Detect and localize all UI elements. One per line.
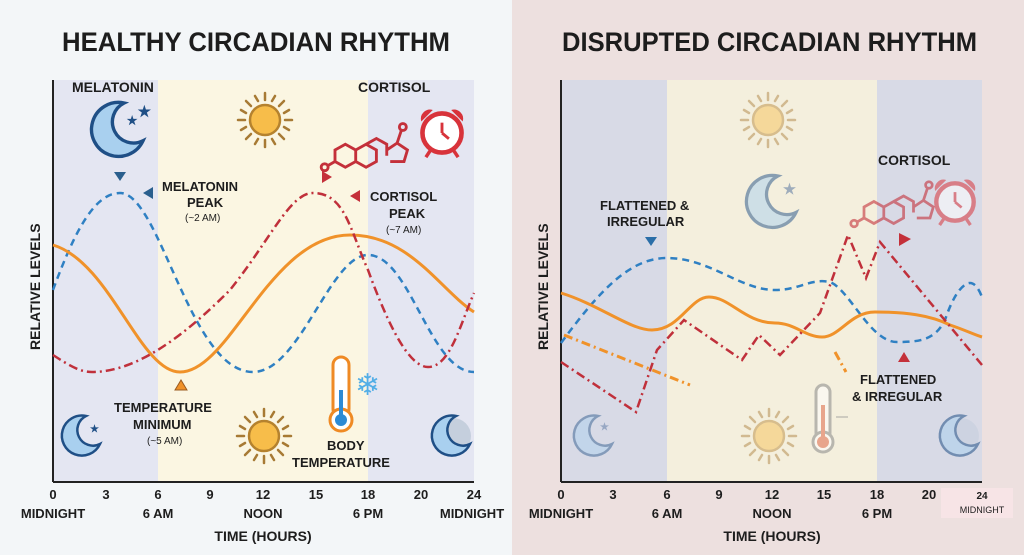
x-axis ticks: 15 xyxy=(309,487,323,502)
line: cortisol xyxy=(53,193,474,372)
label: body temperature: BODY xyxy=(327,438,365,453)
x-axis ticks: 15 xyxy=(817,487,831,502)
icon: sun bottom xyxy=(237,409,291,463)
x-axis ticks: 6 PM xyxy=(862,506,892,521)
line: cortisol disrupted xyxy=(561,235,982,412)
callout: temperature minimum: (~5 AM) xyxy=(147,436,182,447)
callout: flattened melatonin: FLATTENED & xyxy=(600,198,689,213)
icon: faded moon xyxy=(746,175,796,227)
x-axis ticks: NOON xyxy=(244,506,282,521)
line: melatonin xyxy=(53,193,474,372)
x-axis ticks: 9 xyxy=(206,487,214,502)
icon: faded moon bottom-left: ★ xyxy=(600,422,609,433)
marker: cortisol xyxy=(899,233,911,246)
icon: moon bottom-right xyxy=(432,416,471,456)
icon: sun top xyxy=(238,93,292,147)
icon: thermometer xyxy=(330,357,352,431)
x-axis ticks: MIDNIGHT xyxy=(21,506,85,521)
panel: healthy background xyxy=(0,0,512,555)
callout: temperature minimum: TEMPERATURE xyxy=(114,400,212,415)
x-axis ticks: 6 AM xyxy=(652,506,682,521)
chart: disrupted xyxy=(529,80,1013,544)
chart: healthy xyxy=(21,79,504,544)
icon: faded clock xyxy=(935,180,975,225)
icon: faded sun top xyxy=(741,93,795,147)
x-axis ticks: 0 xyxy=(49,487,57,502)
x-axis ticks: MIDNIGHT xyxy=(440,506,504,521)
icon: moon bottom-left: ★ xyxy=(90,424,99,435)
callout: melatonin peak: (~2 AM) xyxy=(185,213,220,224)
label: 24 midnight box: 24 xyxy=(976,491,988,502)
line: temperature fragments xyxy=(564,335,846,385)
title: healthy: HEALTHY CIRCADIAN RHYTHM xyxy=(62,27,450,57)
icon: faded moon bottom-right xyxy=(940,416,979,456)
label: 24 midnight box xyxy=(941,488,1013,518)
callout: temperature minimum: MINIMUM xyxy=(133,417,192,432)
x-axis ticks: 18 xyxy=(870,487,884,502)
x-axis ticks: MIDNIGHT xyxy=(529,506,593,521)
icon: faded moon: ★ xyxy=(783,182,796,198)
callout: flattened melatonin xyxy=(600,198,689,246)
label: cortisol: CORTISOL xyxy=(358,79,431,95)
icon: steroid molecule xyxy=(321,124,407,171)
label: body temperature line 2: TEMPERATURE xyxy=(292,455,390,470)
x-axis ticks: 20 xyxy=(414,487,428,502)
x-axis ticks: 0 xyxy=(557,487,565,502)
callout: cortisol peak: CORTISOL xyxy=(370,189,437,204)
x-axis ticks xyxy=(21,487,504,544)
icon: moon bottom-left xyxy=(62,416,100,456)
x-axis ticks: 3 xyxy=(609,487,617,502)
x-axis ticks: 6 xyxy=(663,487,671,502)
x-axis ticks xyxy=(529,487,936,544)
icon: faded moon bottom-left xyxy=(574,416,612,456)
title: disrupted: DISRUPTED CIRCADIAN RHYTHM xyxy=(562,27,977,57)
callout: flattened cortisol: FLATTENED xyxy=(860,372,936,387)
x-axis ticks: 3 xyxy=(102,487,110,502)
callout: melatonin peak: PEAK xyxy=(187,195,224,210)
line: temperature disrupted xyxy=(561,293,982,337)
x-axis ticks: 6 PM xyxy=(353,506,383,521)
icon: faded thermometer xyxy=(813,385,848,452)
callout: cortisol peak: (~7 AM) xyxy=(386,225,421,236)
x-axis ticks: 9 xyxy=(715,487,723,502)
y-axis label: RELATIVE LEVELS xyxy=(27,223,43,350)
callout: temperature minimum xyxy=(114,380,212,447)
line: melatonin disrupted xyxy=(561,258,982,343)
x-axis ticks: 18 xyxy=(361,487,375,502)
label: 24 midnight box: MIDNIGHT xyxy=(960,505,1005,515)
x-axis ticks: 12 xyxy=(765,487,779,502)
x-axis ticks: TIME (HOURS) xyxy=(214,528,312,544)
icon: snowflake: ❄ xyxy=(355,369,380,402)
callout: cortisol peak: PEAK xyxy=(389,206,426,221)
x-axis ticks: TIME (HOURS) xyxy=(723,528,821,544)
icon: faded steroid xyxy=(851,182,933,227)
y-axis label: RELATIVE LEVELS xyxy=(535,223,551,350)
label: melatonin: MELATONIN xyxy=(72,79,154,95)
icon: faded sun bottom xyxy=(742,409,796,463)
callout: melatonin peak xyxy=(143,179,238,224)
icon: alarm clock xyxy=(421,110,463,157)
icon: moon and stars xyxy=(92,102,152,156)
callout: cortisol peak xyxy=(322,171,437,236)
callout: flattened cortisol: & IRREGULAR xyxy=(852,389,943,404)
marker: melatonin peak xyxy=(114,172,126,181)
x-axis ticks: 20 xyxy=(922,487,936,502)
panel: disrupted background xyxy=(512,0,1024,555)
line: body temperature xyxy=(53,235,474,372)
x-axis ticks: 12 xyxy=(256,487,270,502)
icon: moon and stars: ★ xyxy=(127,114,138,128)
callout: flattened cortisol xyxy=(852,352,943,404)
label: cortisol: CORTISOL xyxy=(878,152,951,168)
x-axis ticks: 6 xyxy=(154,487,162,502)
x-axis ticks: 24 xyxy=(467,487,482,502)
callout: flattened melatonin: IRREGULAR xyxy=(607,214,685,229)
icon: moon and stars: ★ xyxy=(138,105,152,121)
callout: melatonin peak: MELATONIN xyxy=(162,179,238,194)
x-axis ticks: 6 AM xyxy=(143,506,173,521)
x-axis ticks: NOON xyxy=(752,506,792,521)
